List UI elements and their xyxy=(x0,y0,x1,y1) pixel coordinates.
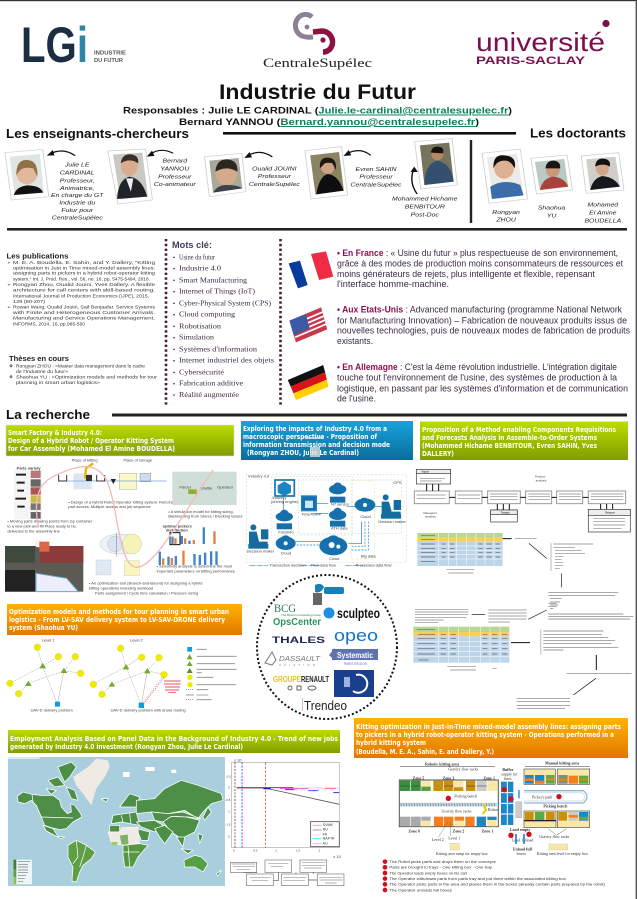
block: les publications: with Finite and Heterogeneous Customer Arrivals. xyxy=(13,310,155,315)
captions and arrows: Post-Doc xyxy=(411,212,440,218)
block: thèses en cours: ❖ xyxy=(9,374,14,379)
banner: kitting optimization xyxy=(354,718,628,758)
flowchart and table: Input xyxy=(422,470,429,474)
chart legend: NAFTA xyxy=(323,837,335,841)
diagram: kitting area: Unload xyxy=(522,837,533,842)
diagram: kitting area: Gravity flow racks xyxy=(539,834,570,839)
picker path: Picker's path xyxy=(532,794,552,799)
heading: les enseignants-chercheurs: Les enseignants-chercheurs xyxy=(6,127,189,141)
captions and arrows: Bernard xyxy=(163,158,188,164)
text: Aux Etats-Unis: existants. xyxy=(337,336,373,346)
diagram: kitting area: Load xyxy=(512,837,520,842)
flag: Germany xyxy=(288,365,328,400)
diagram: kitting area: Zone 5 xyxy=(413,775,424,780)
panel: tour planning xyxy=(7,604,242,713)
banner: kitting optimization: hybrid kitting system xyxy=(356,739,426,747)
flowchart and table: Product xyxy=(535,475,545,479)
banner: exploring the impacts: Exploring the impacts of Industry 4.0 from a xyxy=(243,425,387,433)
banner: optimization models: system (Shaohua YU) xyxy=(9,624,78,632)
operations list: The Robot picks parts and drops them on the conveyor xyxy=(389,859,497,864)
banner: kitting optimization: (Boudella, M. E. A., Sahin, E. and Dallery, Y.) xyxy=(356,748,494,756)
diagram: kitting system: Operator xyxy=(217,485,234,490)
photo: Julie Le Cardinal xyxy=(5,149,49,200)
buffer column: supply for xyxy=(501,771,518,776)
diagram: kitting system: Place of storage xyxy=(123,457,153,462)
network diagram: Level 1 xyxy=(42,637,55,642)
captions and arrows: Professeur xyxy=(158,174,192,180)
flow boxes xyxy=(231,860,344,886)
logo: LGI Industrie du Futur xyxy=(21,17,126,73)
logo: Groupe Renault: GROUPE xyxy=(273,675,301,684)
captions and arrows: Professeur xyxy=(359,174,394,180)
text: En France xyxy=(337,248,624,289)
captions and arrows: Professeur xyxy=(258,173,292,180)
block: les publications: Rowan Wang, Oualid Jouini, Saif Benjaafar. Service Systems xyxy=(13,305,156,310)
diagram: kitting system: • Design of a hybrid Robot-Operator kitting system: Robot's xyxy=(68,499,173,504)
captions and arrows: YU xyxy=(547,213,557,219)
banner: exploring the impacts: information transmission and decision mode xyxy=(243,441,390,449)
flowchart and table: analysis xyxy=(536,478,547,482)
diagram: cloud architecture: Cloud xyxy=(281,550,291,555)
diagram: kitting area: Zone 3 xyxy=(443,775,454,780)
block: thèses en cours: Thèses en cours xyxy=(9,354,69,363)
logo: THALES: THALES xyxy=(272,635,325,646)
block: mots clé: Cyber-Physical System (CPS) xyxy=(179,298,272,307)
logo: LGI Industrie du Futur: LGi xyxy=(21,17,88,73)
captions and arrows: Mohamed xyxy=(588,202,619,208)
logo: blue square xyxy=(334,670,374,697)
diagram: kitting area: Load empty xyxy=(510,827,530,832)
text: Aux Etats-Unis: • Aux Etats-Unis : Advanced manufacturing (programme National Network xyxy=(337,305,623,315)
diagram: kitting system: Backloading from Stores / Blocking issues xyxy=(168,514,243,519)
panel: smart factory xyxy=(5,425,243,595)
network diagram: Level 2 xyxy=(130,637,144,642)
banner: optimization models xyxy=(7,604,242,635)
flag: USA xyxy=(289,307,327,342)
network diagram: UAV-D delivery problem xyxy=(31,708,74,713)
block: mots clé: Smart Manufacturing xyxy=(179,275,247,284)
banner: employment analysis: generated by Industry 4.0 investment (Rongyan Zhou, Julie Le Cardinal) xyxy=(10,743,243,751)
photo: Shaohua Yu xyxy=(531,155,572,194)
text: En France: moins générateurs de rejets, plus intelligente et flexible, repensant xyxy=(337,269,596,279)
diagram: kitting area: Gravity flow racks xyxy=(442,809,472,814)
diagram: kitting system: Parts variety xyxy=(17,465,41,470)
table bottom xyxy=(413,627,509,670)
diagram: cloud architecture: Industry 4.0 xyxy=(248,473,270,478)
diagram: kitting system: to a new pick-and-fill Place ready to be xyxy=(7,523,77,528)
operations list: The Operator loads empty boxes on his cart xyxy=(389,870,468,875)
logo: Dassault xyxy=(265,652,321,667)
block: thèses en cours: Rongyan ZHOU : «Master data management dans le cadre xyxy=(16,363,145,368)
table and notes lower xyxy=(413,603,633,709)
diagram: kitting system: Place of kitting xyxy=(72,457,98,462)
diagram: kitting area: boxes xyxy=(517,851,526,856)
chart: trend lines: 0.5 xyxy=(227,774,231,778)
diagram: kitting system: Shuttle xyxy=(200,485,213,490)
diagram: kitting area: Unload full xyxy=(513,847,533,852)
text: Aux Etats-Unis: nouvelles technologies, puis de nouveaux modes de fabrication de produits xyxy=(337,326,631,336)
logo: Groupe Renault xyxy=(273,675,329,690)
captions and arrows: El Amine xyxy=(589,210,617,216)
panel: kitting optimization xyxy=(354,718,628,892)
banner: proposition of a method: DALLERY) xyxy=(422,450,454,458)
captions and arrows: Futur pour xyxy=(61,207,94,214)
captions and arrows: Oualid JOUINI xyxy=(252,166,297,172)
diagram: kitting system xyxy=(5,457,243,595)
banner: smart factory: Smart Factory & Industry 4.0: xyxy=(8,429,102,437)
block: les publications: Les publications xyxy=(6,252,68,260)
bottom row bins xyxy=(400,817,497,826)
captions and arrows: Julie LE xyxy=(64,162,90,168)
logo: Trendeo: Trendeo xyxy=(304,699,347,713)
captions and arrows: CentraleSupélec xyxy=(52,215,104,221)
diagram: kitting system: important parameters on kitting performance xyxy=(157,569,236,574)
operations list: The Operator withdraws parts from parts tray and put them within the associated kitting box xyxy=(389,876,566,881)
captions and arrows: CentraleSupélec xyxy=(351,182,402,188)
icon: decision maker right xyxy=(381,494,401,519)
logo: sculpteo: sculpteo xyxy=(337,605,380,621)
diagram: cloud architecture: CPS xyxy=(393,480,402,485)
chart: trend lines: 0 xyxy=(228,786,230,790)
chart legend xyxy=(311,822,339,847)
operations list: The Operator unloads full boxes xyxy=(389,887,452,892)
diagram: kitting system: • A simulation model for kitting sizing, xyxy=(168,509,234,514)
banner: employment analysis xyxy=(8,730,340,753)
logo: LGI Industrie du Futur: DU FUTUR xyxy=(94,58,123,64)
captions and arrows: Animatrice, xyxy=(59,185,95,192)
logo: OpsCenter: OpsCenter xyxy=(273,616,321,628)
text: En Allemagne: touche tout l'environnement de l'usine, des systèmes de production à la xyxy=(337,373,617,383)
banner: optimization models: logistics - From LV-SAV delivery system to LV-SAV-DRONE delivery xyxy=(9,616,226,624)
buffer column xyxy=(501,767,518,825)
diagram: kitting area: Robotic kitting area xyxy=(425,761,459,766)
top row bins xyxy=(400,781,497,791)
block: thèses en cours: Shaohua YU : «Optimization models and methods for tour xyxy=(16,374,158,379)
logo: Dassault: AVIATION xyxy=(279,663,315,667)
panel: exploring the impacts of Industry 4.0 xyxy=(241,421,413,568)
diagram: cloud architecture: Cloud xyxy=(360,514,371,519)
chart: trend lines: x 10 xyxy=(333,854,342,859)
diagram: cloud architecture: Industry xyxy=(272,495,287,500)
diagram: kitting area: Zone 6 xyxy=(408,829,420,834)
diagram: cloud architecture: ATH data xyxy=(331,525,348,530)
banner: exploring the impacts xyxy=(241,421,413,460)
block: thèses en cours xyxy=(9,354,158,385)
diagram: kitting system: Parts assignment / Cycle time calculation / Pressure sizing xyxy=(95,590,198,595)
text: En Allemagne: de l'usine. xyxy=(337,394,376,404)
operations list: Parts are brought to trays - One kitting box - One tray xyxy=(389,865,492,870)
captions and arrows: ZHOU xyxy=(495,217,516,223)
logo: Dassault: DASSAULT xyxy=(279,654,321,663)
diagram: cloud architecture: Plan data flow xyxy=(311,563,336,568)
diagram: kitting system: Parcel xyxy=(179,485,191,490)
chart: trend lines: -2 xyxy=(227,834,230,838)
chart: trend lines: -1.5 xyxy=(225,822,231,826)
block: mots clé: Fabrication additive xyxy=(179,379,244,388)
captions and arrows: En charge du GT xyxy=(51,192,105,199)
banner: proposition of a method: Proposition of a Method enabling Components Requisitions xyxy=(422,426,616,434)
network diagram xyxy=(7,637,237,713)
manual area: Manual kitting area xyxy=(545,760,579,765)
text: Aux Etats-Unis: for Manufacturing Innovation) – Fabrication de nouveaux produits issus de xyxy=(337,315,627,325)
diagram: kitting area: Picking bench xyxy=(543,803,568,808)
chart: trend lines: 0 xyxy=(233,849,235,853)
people: photos and captions xyxy=(5,138,624,224)
photo: Oualid Jouini xyxy=(204,153,246,197)
banner: smart factory xyxy=(6,425,234,456)
icon: factory box xyxy=(275,480,294,496)
diagram: cloud architecture: Decision maker xyxy=(247,549,275,554)
block: les publications: ➢ xyxy=(7,282,11,287)
block: les publications: International Journal of Production Economics (IJPE), 2015, xyxy=(13,293,149,298)
heading: les doctorants: Les doctorants xyxy=(530,126,626,140)
responsables: Bernard YANNOU ( Bernard.yannou@centralesupelec.fr ) xyxy=(179,117,479,128)
operations list xyxy=(383,859,606,892)
block: les publications: Rongyan Zhou, Oualid Jouini, Yves Dallery. A flexible xyxy=(13,282,156,287)
chart legend: RU xyxy=(323,828,328,832)
diagram: kitting area: Robot xyxy=(488,807,499,812)
logo: sculpteo xyxy=(324,605,380,621)
text: En Allemagne: logistique, en passant par les systèmes d'information et de communication xyxy=(337,383,628,393)
block: mots clé: Mots clé: xyxy=(172,240,212,250)
captions and arrows: CentraleSupélec xyxy=(249,181,301,188)
logo: opeo: opeo xyxy=(334,626,378,645)
banner: optimization models: Optimization models and methods for tour planning in smart urban xyxy=(9,608,229,616)
icon: chip xyxy=(302,496,316,511)
text: En France: grâce à des modes de production moins consommateurs de ressources et xyxy=(337,259,624,269)
diagram: kitting area: Zone 2 xyxy=(453,829,464,834)
diagram: cloud architecture: Cloud xyxy=(329,556,339,561)
responsables: Responsables : Julie LE CARDINAL ( Julie.le-cardinal@centralesupelec.fr ) xyxy=(123,106,512,116)
flowchart and table: Manager's xyxy=(423,511,438,515)
banner: employment analysis: Employment Analysis Based on Panel Data in the Background of Industry 4.0 - Trend of new jobs xyxy=(10,735,338,743)
diagram: cloud architecture: Fms/info xyxy=(278,529,294,534)
diagram: cloud architecture: N7 sensor xyxy=(331,502,350,507)
block: mots clé xyxy=(172,240,274,399)
table top xyxy=(417,533,503,573)
chart: trend lines: 1.5 xyxy=(296,849,300,853)
block: les publications: INFORMS, 2014, 16, pp.985-560 xyxy=(13,322,85,327)
banner: exploring the impacts: (Rongyan ZHOU, Julie Le Cardinal) xyxy=(247,449,359,457)
text: En France: l'interface homme-machine. xyxy=(337,279,449,289)
banner: proposition of a method xyxy=(420,422,628,460)
block: mots clé: Systèmes d'information xyxy=(179,344,257,353)
picker path xyxy=(524,791,587,803)
logo: BCG: The Boston Consulting Group xyxy=(281,613,322,617)
responsables xyxy=(123,106,512,128)
block: mots clé: Réalité augmentée xyxy=(179,390,240,399)
logo: Systematic: Systematic xyxy=(337,651,373,660)
block: les publications: ➢ xyxy=(7,305,11,310)
text: En Allemagne xyxy=(337,362,628,404)
block: les publications: system," Int. J. Prod. Res., vol. 56, no. 16, pp. 5475-5494, 2018. xyxy=(13,276,150,281)
diagram: cloud architecture: Fms/ASRP xyxy=(302,512,322,517)
diagram: kitting area xyxy=(399,760,590,856)
captions and arrows: Co-animateur xyxy=(154,181,197,188)
captions and arrows: Mohammed Hichame xyxy=(392,196,458,202)
diagram: kitting area: Kitting area level for empty box xyxy=(537,851,588,856)
operations list: The Operator picks parts in the area and places them in the boxes (already contain parts prepared by the robot) xyxy=(389,882,606,887)
captions and arrows xyxy=(47,150,621,224)
chart: trend lines: 0.5 xyxy=(253,849,258,853)
block: les publications: assigning parts to pickers in a hybrid robot-operator kitting xyxy=(13,271,156,276)
logo: Université Paris-Saclay xyxy=(476,20,610,67)
banner: smart factory: for Car Assembly (Mohamed El Amine BOUDELLA) xyxy=(8,445,175,453)
banner: proposition of a method: and Forecasts Analysis in Assemble-to-Order Systems xyxy=(422,434,597,442)
text: Aux Etats-Unis xyxy=(337,305,631,346)
block: les publications: architecture for call centers with skill-based routing. xyxy=(13,288,155,293)
block: mots clé: Simulation xyxy=(179,333,214,342)
logo: BCG: BCG xyxy=(274,601,296,615)
diagram: kitting system: • Sensitivity analysis to determine the most xyxy=(157,563,233,568)
diagram: kitting area: Kitting area ramp for empty box xyxy=(436,851,488,856)
chart legend: AU xyxy=(323,842,328,846)
block: les publications: 129 (80-207) xyxy=(13,299,46,304)
logo: BCG xyxy=(274,601,322,617)
buffer column: Buffer xyxy=(502,767,514,772)
logo: Systematic: PARIS REGION xyxy=(344,662,367,666)
bar charts: optimal pickers xyxy=(163,523,193,528)
block: mots clé: Internet industriel des objets xyxy=(179,356,274,365)
pink arrow xyxy=(36,467,213,567)
logo: Groupe Renault: RENAULT xyxy=(301,675,329,684)
diagram: kitting area: Picking bench xyxy=(454,794,477,799)
chart legend: FA xyxy=(323,832,328,836)
parts table xyxy=(14,470,42,519)
diagram: kitting area: Gravity flow racks xyxy=(448,767,479,772)
diagram: kitting system: delivered to the assembly line xyxy=(7,528,61,533)
chart: trend lines: -0.5 xyxy=(225,798,231,802)
logo: Systematic xyxy=(329,648,378,666)
logo: CentraleSupélec: CentraleSupélec xyxy=(263,55,372,70)
block: les publications: optimisation in Just in Time mixed-model assembly lines: xyxy=(13,265,155,270)
chart: trend lines: -1 xyxy=(227,810,230,814)
banner: smart factory: Design of a Hybrid Robot / Operator Kitting System xyxy=(8,437,174,445)
captions and arrows: BOUDELLA xyxy=(584,218,621,224)
diagram: cloud architecture: (driving engine) xyxy=(271,499,299,504)
captions and arrows: BENBITOUR xyxy=(405,204,445,210)
block: les publications: ➢ xyxy=(7,260,11,265)
banner: exploring the impacts: macroscopic perspective - Proposition of xyxy=(243,433,377,441)
block: les publications: M. E. A. Boudella, E. Sahin, and Y. Dallery, "Kitting xyxy=(13,260,156,265)
block: mots clé: Cloud computing xyxy=(179,310,235,319)
diagram: kitting area: Level 1 xyxy=(448,836,460,841)
heading: la recherche: La recherche xyxy=(6,407,90,422)
block: thèses en cours: de l'Industrie du futur» xyxy=(16,369,69,374)
diagram: kitting system: • Moving parts drawing points from Gy container xyxy=(7,519,93,524)
flowchart and table: Output xyxy=(605,511,615,515)
diagram: kitting system: • An optimization tool (Branch-and-Bound) for designing a hybrid xyxy=(89,581,202,586)
flowchart and table: analysis xyxy=(425,515,436,519)
logo: Université Paris-Saclay: université xyxy=(476,27,605,57)
title: Industrie du Futur xyxy=(219,81,416,104)
block: mots clé: Internet of Things (IoT) xyxy=(179,287,256,296)
panel: employment analysis xyxy=(8,730,344,886)
captions and arrows: Evren SAHIN xyxy=(356,166,397,173)
logo: CentraleSupélec xyxy=(263,14,372,70)
block: mots clé: Industrie 4.0 xyxy=(179,264,221,273)
diagram: kitting area: Zone 1 xyxy=(483,775,495,780)
diagram: kitting area: Level 2 xyxy=(432,837,444,842)
text: En France: • En France : « Usine du futur » plus respectueuse de son environnement, xyxy=(337,248,618,258)
logo: LGI Industrie du Futur: INDUSTRIE xyxy=(94,50,126,56)
diagram: kitting system: kitting operations including workload xyxy=(89,585,153,590)
photo: Bernard Yannou xyxy=(108,149,152,204)
chart: trend lines: 1 xyxy=(275,849,277,853)
captions and arrows: Rongyan xyxy=(492,209,520,216)
logo: Université Paris-Saclay: PARIS-SACLAY xyxy=(476,55,586,67)
captions and arrows: Shaohua xyxy=(538,205,566,211)
panel: method requisitions and forecasts xyxy=(413,422,633,709)
logo: CS twitter mark xyxy=(313,584,344,605)
diagram: cloud architecture xyxy=(247,473,407,568)
photo: Evren Sahin xyxy=(305,147,348,199)
panel: partners circle xyxy=(257,575,397,719)
photo: Mohamed El Amine Boudella xyxy=(581,153,624,193)
network diagram: UAV-D delivery problem with drone routing xyxy=(111,708,186,713)
block: les publications xyxy=(6,252,156,327)
bar charts xyxy=(159,523,218,565)
diagram: cloud architecture: Decision maker xyxy=(378,519,406,524)
block: mots clé: Robotisation xyxy=(179,321,221,330)
chart legend: SVMK xyxy=(323,823,334,827)
block: mots clé: Usine du futur xyxy=(179,252,215,261)
bar charts: distribution xyxy=(166,527,188,532)
photo: Mohammed Hichame Benbitour xyxy=(415,138,457,189)
diagram: kitting system: part access, Multiple access and job sequence xyxy=(68,504,152,509)
captions and arrows: YANNOU xyxy=(160,166,190,172)
icon: decision maker left xyxy=(248,524,268,549)
chart: trend lines xyxy=(225,758,344,886)
captions and arrows: CARDINAL xyxy=(60,170,95,176)
flowchart and table xyxy=(414,469,630,608)
factory photo xyxy=(5,539,83,592)
block: mots clé: Cybersécurité xyxy=(179,367,225,376)
block: les publications: Manufacturing and Service Operations Management, xyxy=(13,316,155,321)
diagram: cloud architecture: Big data xyxy=(361,553,376,558)
diagram: kitting area: Zone 1 xyxy=(482,829,493,834)
block: thèses en cours: ❖ xyxy=(9,363,14,368)
chart: world map xyxy=(8,757,225,886)
chart: trend lines: 2 xyxy=(319,849,321,853)
photo: Rongyan Zhou xyxy=(482,149,528,203)
legend xyxy=(186,647,237,700)
banner: proposition of a method: (Mohammed Hichame BENBITOUR, Evren SAHIN, Yves xyxy=(422,442,597,450)
buffer column: lines xyxy=(504,776,512,781)
captions and arrows: Industrie du xyxy=(59,200,96,206)
chart: trend lines: x 10 xyxy=(234,758,242,763)
ellipses diagram xyxy=(96,533,141,576)
block: thèses en cours: planning in smart urban logistics» xyxy=(16,380,101,385)
text: En Allemagne: • En Allemagne : C'est la 4ème révolution industrielle. L'intégration digitale xyxy=(337,362,617,372)
captions and arrows: Professeur, xyxy=(60,178,95,184)
diagram: cloud architecture: Processed data flow xyxy=(356,563,392,568)
flag: France xyxy=(289,251,333,288)
flowchart and table: Target xyxy=(501,511,510,515)
icons: clouds xyxy=(276,482,375,555)
diagram: cloud architecture: Transaction decision xyxy=(269,563,306,568)
map legend xyxy=(13,860,32,884)
